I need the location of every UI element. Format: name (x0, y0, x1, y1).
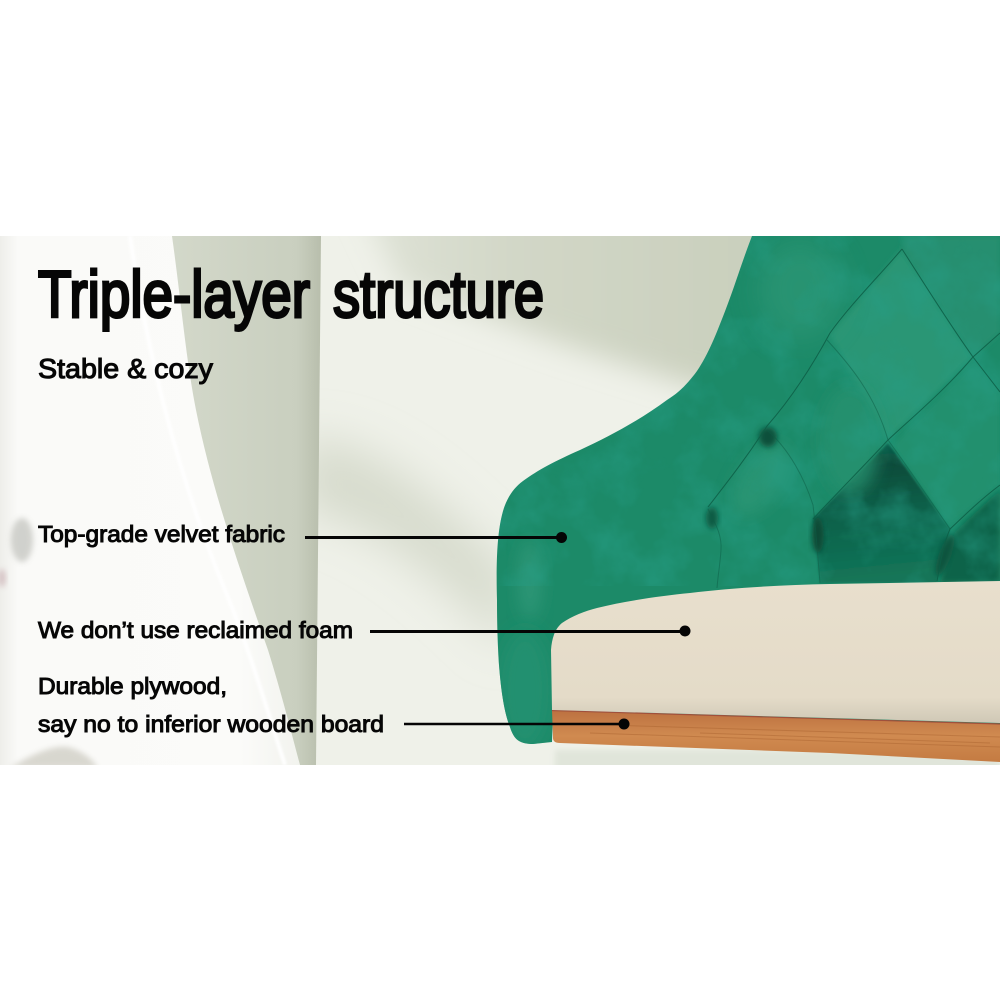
callout: plywood (38, 673, 630, 737)
tuft buttons (706, 427, 958, 578)
callout: plywood: Durable plywood, (38, 673, 227, 699)
curtain (0, 236, 300, 768)
wall column (160, 236, 321, 765)
wall shadows (318, 236, 1000, 765)
title (38, 257, 544, 331)
plywood layer (552, 710, 1000, 762)
chair back: velvet fabric (490, 236, 1000, 750)
callout: velvet fabric (38, 521, 567, 547)
foam layer (551, 581, 1000, 723)
callout: foam: We don’t use reclaimed foam (38, 617, 353, 643)
title: structure (333, 257, 544, 331)
callout: velvet fabric: Top-grade velvet fabric (38, 521, 285, 547)
subtitle: Stable & cozy (38, 353, 213, 384)
velvet mottling (490, 236, 1000, 586)
photo band (0, 200, 1000, 775)
title: Triple-layer (38, 257, 310, 331)
callout: foam (38, 617, 690, 643)
callout: plywood: say no to inferior wooden board (38, 711, 384, 737)
infographic canvas (0, 236, 1000, 765)
tufting seams (708, 249, 1000, 588)
wall background (316, 236, 1000, 765)
